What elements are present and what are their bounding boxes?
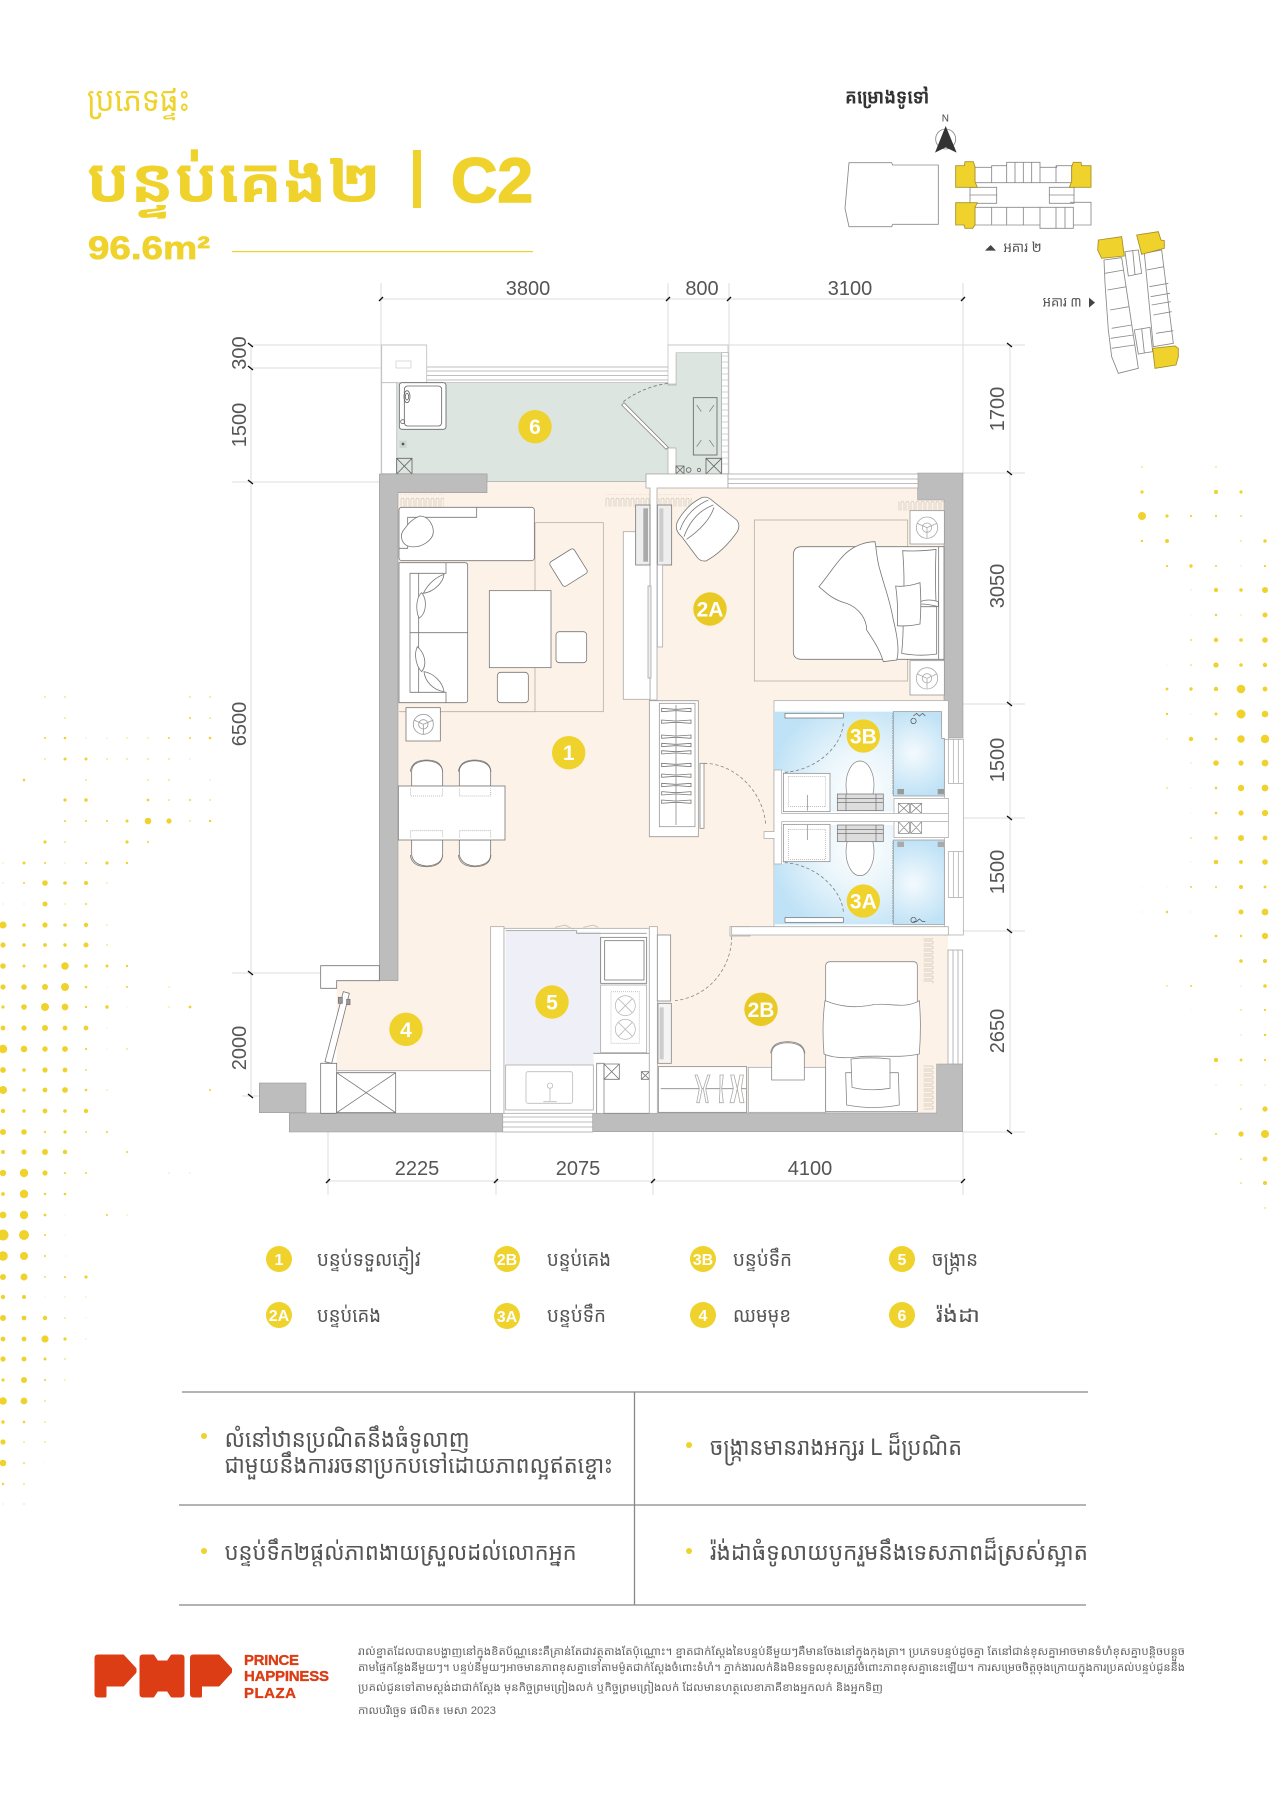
storage box — [397, 458, 412, 474]
legend item 3A: 3A — [497, 1309, 518, 1326]
dimension labels: 3800 — [506, 278, 550, 300]
nightstand top — [910, 511, 944, 544]
legend item 2A — [266, 1302, 381, 1328]
dimension labels: 300 — [229, 336, 251, 370]
disclaimer text: តាមផ្ទៃកន្លែងនីមួយៗ។ បន្ទប់នីមួយៗអាចមានភាពខុសគ្នាទៅតាមម៉ូតជាក់ស្តែងចំពោះទំហំ។ ភ្នាក់ងារលក់និងមិនទទួលខុសត្រូវចំពោះភាពខុសគ្នានេះឡើយ។ ការសម្រេចចិត្តចុងក្រោយក្នុងការប្រគល់បន្ទប់ជូននឹង — [358, 1660, 1185, 1677]
rug — [535, 523, 603, 712]
floor plan — [259, 345, 963, 1132]
title: C2: C2 — [451, 146, 533, 216]
interior partitions and window rails — [503, 474, 963, 1132]
legend item 2B: 2B — [497, 1252, 517, 1269]
badge bathroom 3B — [847, 719, 880, 753]
legend item 5 — [889, 1246, 978, 1275]
curtains — [923, 938, 935, 983]
bedroom 2B air conditioner — [658, 1003, 671, 1063]
structural walls — [259, 473, 963, 1132]
main sofa — [399, 563, 468, 703]
feature table — [179, 1392, 1088, 1605]
dimension labels: 2225 — [395, 1158, 439, 1180]
dimension labels: 6500 — [229, 702, 251, 746]
legend item 2A: បន្ទប់គេង — [317, 1305, 381, 1328]
balcony walls and door — [321, 966, 491, 1113]
legend item 5: ចង្ក្រាន — [932, 1249, 978, 1275]
dimension labels: 3050 — [987, 564, 1009, 608]
veranda door — [622, 383, 668, 449]
wardrobe — [649, 701, 698, 837]
header: unit type — [86, 81, 533, 266]
single bed — [823, 962, 920, 1112]
building 1 outline — [845, 163, 938, 227]
feature: luxury residence: លំនៅឋានប្រណិតនឹងធំទូលាញ — [225, 1425, 470, 1455]
door of bedroom 2B — [657, 927, 750, 1001]
subtitle: unit type label: ប្រភេទផ្ទះ — [87, 81, 190, 121]
legend item 1: បន្ទប់ទទួលភ្ញៀវ — [317, 1246, 421, 1275]
dimension labels: 800 — [685, 278, 719, 300]
building 2 — [956, 162, 1091, 255]
logo wordmark: PRINCE — [244, 1652, 299, 1669]
label: building 3: អគារ ៣ — [1043, 294, 1082, 310]
site key plan — [845, 85, 1178, 373]
number badge 4 — [389, 1013, 423, 1046]
dining table — [398, 786, 505, 840]
number badge 5 — [535, 985, 569, 1019]
feature: L-shaped kitchen — [686, 1432, 962, 1466]
number badge 2A: 2A — [697, 598, 723, 622]
disclaimer text: រាល់ខ្នាតដែលបានបង្ហាញនៅក្នុងខិតប័ណ្ណនេះគឺគ្រាន់តែជាវត្ថុតាងតែប៉ុណ្ណោះ។ ខ្នាតជាក់ស្តែងនៃបន្ទប់នីមួយៗគឺមានចែងនៅក្នុងកុងត្រា។ ប្រភេទបន្ទប់ដូចគ្នា តែនៅជាន់ខុសគ្នាអាចមានទំហំខុសគ្នាបន្តិចបន្តួច — [358, 1643, 1185, 1661]
cooktop — [601, 985, 647, 1053]
logo wordmark — [244, 1652, 329, 1702]
dimension labels: 4100 — [788, 1158, 832, 1180]
legend item 3B: បន្ទប់ទឹក — [733, 1248, 792, 1272]
legend item 3B: 3B — [693, 1252, 713, 1269]
legend item 3B — [690, 1246, 792, 1272]
legend item 4: ឈមមុខ — [733, 1305, 791, 1329]
wardrobe — [658, 1067, 747, 1112]
badge bathroom 3A — [847, 884, 880, 918]
dimension labels: 1500 — [987, 738, 1009, 782]
dimension labels: 2075 — [556, 1158, 600, 1180]
legend item 3A — [494, 1303, 606, 1329]
dimension labels — [229, 278, 1009, 1180]
feature: luxury residence: ជាមួយនឹងការរចនាប្រកបទៅដោយភាពល្អឥតខ្ចោះ — [225, 1451, 613, 1480]
logo mark PHP — [96, 1656, 230, 1696]
badge bathroom 3A: 3A — [850, 891, 877, 914]
curtains — [400, 494, 444, 507]
nightstand bottom — [910, 661, 944, 695]
stool lower — [497, 672, 528, 703]
double bed — [793, 542, 944, 662]
feature: L-shaped kitchen: ចង្ក្រានមានរាងអក្សរ L ដ៏ប្រណិត — [710, 1432, 962, 1466]
ottoman — [549, 548, 588, 587]
production date: កាលបរិច្ឆេទ ផលិត៖ មេសា 2023 — [358, 1703, 496, 1717]
kitchen sink counter — [506, 1053, 649, 1113]
legend item 4: 4 — [699, 1308, 708, 1325]
logo: Prince Happiness Plaza — [96, 1652, 329, 1702]
chair — [771, 1042, 805, 1080]
air conditioner units — [636, 505, 672, 565]
legend item 6: 6 — [898, 1308, 907, 1325]
number badge 2A — [693, 592, 727, 626]
number badge 6 — [518, 410, 552, 443]
rug — [754, 520, 908, 681]
panel: bedroom 2B furniture — [658, 927, 948, 1112]
bathroom 3B — [774, 712, 948, 813]
label: building 2: អគារ ២ — [1003, 239, 1042, 255]
logo wordmark: PLAZA — [244, 1685, 296, 1702]
number badge 1 — [552, 736, 585, 769]
legend item 2B — [494, 1246, 611, 1272]
icon: washing machine — [399, 383, 446, 429]
legend item 1: 1 — [275, 1252, 284, 1269]
stool right — [556, 632, 587, 663]
legend item 3A: បន្ទប់ទឹក — [547, 1304, 606, 1328]
chaise sofa — [399, 507, 534, 561]
number badge 5: 5 — [546, 992, 558, 1014]
wall left of kitchen — [491, 927, 504, 1113]
desk — [748, 1067, 826, 1112]
fridge — [601, 937, 647, 983]
key plan heading: គម្រោងទូទៅ — [845, 85, 929, 109]
dimension ticks — [248, 297, 1012, 1183]
legend item 6: រ៉ង់ដា — [936, 1303, 980, 1327]
coffee table — [489, 591, 551, 668]
legend item 5: 5 — [898, 1252, 907, 1269]
dimension labels: 2000 — [229, 1026, 251, 1070]
number badge 6: 6 — [529, 416, 541, 439]
disclaimer text: ប្រគល់ជូនទៅតាមស្តង់ដាជាក់ស្តែង មុនកិច្ចព្រមព្រៀងលក់ ឬកិច្ចព្រមព្រៀងលក់ ដែលមានហត្ថលេខាភាគីខាងអ្នកលក់ និងអ្នកទិញ — [358, 1680, 883, 1694]
icon: north arrow — [935, 114, 957, 153]
curtain — [898, 501, 944, 513]
bathroom 3A — [774, 822, 948, 924]
kitchen base — [504, 925, 649, 1113]
legend item 4 — [690, 1302, 791, 1329]
legend item 2B: បន្ទប់គេង — [547, 1249, 611, 1272]
logo wordmark: HAPPINESS — [244, 1668, 329, 1685]
panel: veranda zone 6 — [382, 345, 728, 482]
legend — [266, 1246, 980, 1329]
armchair — [676, 497, 739, 561]
panel: dining and balcony — [321, 760, 750, 1113]
wall beside kitchen — [649, 927, 657, 1113]
decorative dots: left — [0, 696, 211, 1505]
feature: two bathrooms: បន្ទប់ទឹក២ផ្តល់ភាពងាយស្រួលដល់លោកអ្នក — [225, 1538, 577, 1567]
title divider bar — [413, 150, 421, 208]
number badge 1: 1 — [563, 742, 575, 765]
dimension labels: 1500 — [229, 403, 251, 447]
disclaimer text — [358, 1643, 1185, 1717]
dining chairs — [410, 760, 491, 867]
top wall of 2B — [732, 927, 948, 935]
feature: spacious veranda: រ៉ង់ដាធំទូលាយបូករួមនឹងទេសភាពដ៏ស្រស់ស្អាត — [710, 1537, 1088, 1568]
title: two bedroom C2: បន្ទប់គេង២ — [86, 147, 381, 220]
number badge 2B: 2B — [748, 999, 774, 1022]
dimension labels: 1500 — [987, 850, 1009, 894]
decorative dots: right — [1138, 466, 1269, 1209]
building 3 — [1043, 232, 1178, 373]
unit area: 96.6m² — [88, 230, 210, 266]
number badge 4: 4 — [400, 1019, 412, 1042]
panel: living room furniture — [399, 494, 739, 741]
number badge 2B — [744, 993, 778, 1026]
dimension labels: 1700 — [987, 387, 1009, 431]
feature: luxury residence — [201, 1425, 613, 1480]
panel: bathrooms 3A and 3B — [764, 701, 963, 935]
legend item 6 — [889, 1302, 980, 1328]
badge bathroom 3B: 3B — [850, 726, 877, 749]
planter box — [693, 398, 717, 455]
dimension lines — [232, 283, 1025, 1195]
panel: bedroom 2A furniture — [649, 501, 944, 837]
wall stub between bathrooms — [764, 770, 948, 864]
room fills: living, bedrooms, hall, balcony — [337, 481, 948, 1113]
side table with lamp — [406, 708, 440, 741]
legend item 1 — [266, 1246, 421, 1275]
dimension labels: 3100 — [828, 278, 872, 300]
dimension labels: 2650 — [987, 1009, 1009, 1053]
icon: north arrow: N — [942, 114, 949, 125]
door to bedroom 2A — [700, 763, 766, 828]
legend item 2A: 2A — [269, 1308, 290, 1325]
